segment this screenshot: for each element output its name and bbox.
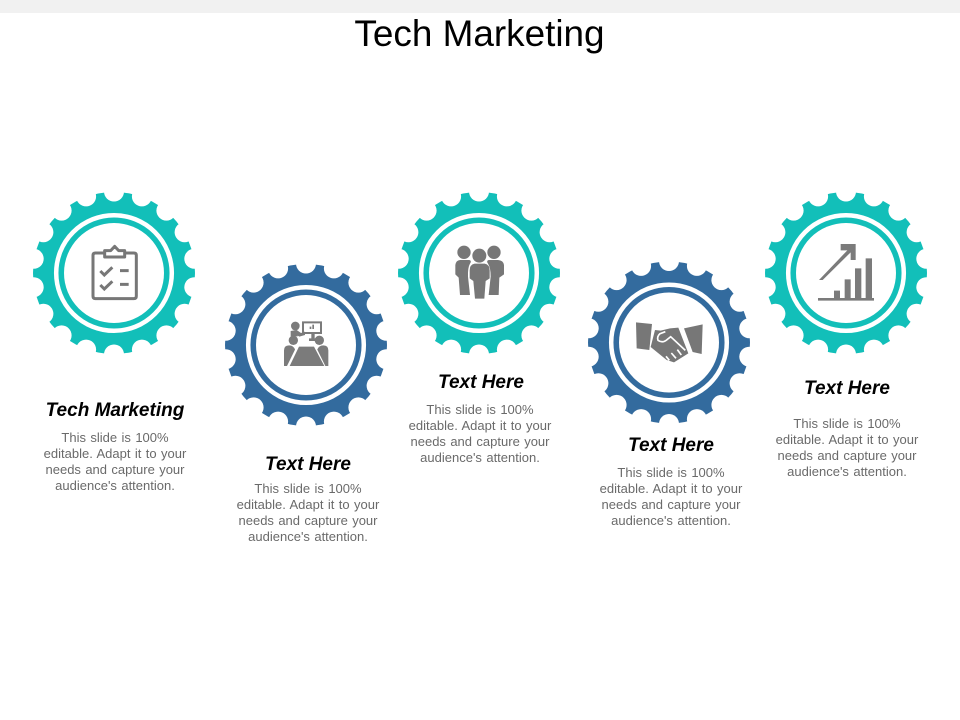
text block 3: editable. Adapt it to your: [409, 418, 551, 433]
text block 5: [776, 416, 918, 479]
gear 5: teal: [756, 182, 936, 364]
text block 1: needs and capture your: [46, 462, 184, 477]
heading: Text Here 4: Text Here: [628, 435, 714, 456]
heading: Text Here 2: Text Here: [265, 454, 351, 475]
text block 2: audience's attention.: [248, 529, 368, 544]
icon: handshake: [636, 322, 703, 362]
heading: Text Here 3: Text Here: [438, 372, 524, 393]
gear 3: teal: [389, 182, 569, 364]
gear 4: blue: [579, 251, 759, 434]
text block 4: editable. Adapt it to your: [600, 481, 742, 496]
text block 5: needs and capture your: [778, 448, 916, 463]
heading: Tech Marketing: Tech Marketing: [46, 400, 184, 421]
text block 4: This slide is 100%: [617, 465, 725, 480]
text block 2: [237, 481, 380, 544]
gear 2: blue: [216, 254, 396, 436]
text block 2: This slide is 100%: [254, 481, 362, 496]
text block 5: audience's attention.: [787, 464, 907, 479]
gear 1: teal: [24, 182, 204, 364]
text block 3: needs and capture your: [410, 434, 550, 449]
text block 3: This slide is 100%: [426, 402, 534, 417]
text block 4: audience's attention.: [611, 513, 731, 528]
heading: Text Here 5: Text Here: [804, 378, 890, 399]
text block 1: This slide is 100%: [61, 430, 169, 445]
icon: clipboard checklist: [93, 246, 136, 299]
text block 2: needs and capture your: [238, 513, 378, 528]
text block 1: [44, 430, 186, 493]
text block 4: needs and capture your: [602, 497, 740, 512]
text block 1: editable. Adapt it to your: [44, 446, 186, 461]
icon: growth chart with arrow: [818, 244, 874, 301]
text block 1: audience's attention.: [55, 478, 175, 493]
text block 5: This slide is 100%: [793, 416, 901, 431]
text block 3: [409, 402, 552, 465]
icon: meeting room presentation: [284, 321, 328, 366]
text block 2: editable. Adapt it to your: [237, 497, 379, 512]
text block 5: editable. Adapt it to your: [776, 432, 918, 447]
title: Tech Marketing: [354, 13, 605, 54]
text block 3: audience's attention.: [420, 450, 540, 465]
text block 4: [600, 465, 742, 528]
icon: group of people: [455, 246, 504, 299]
